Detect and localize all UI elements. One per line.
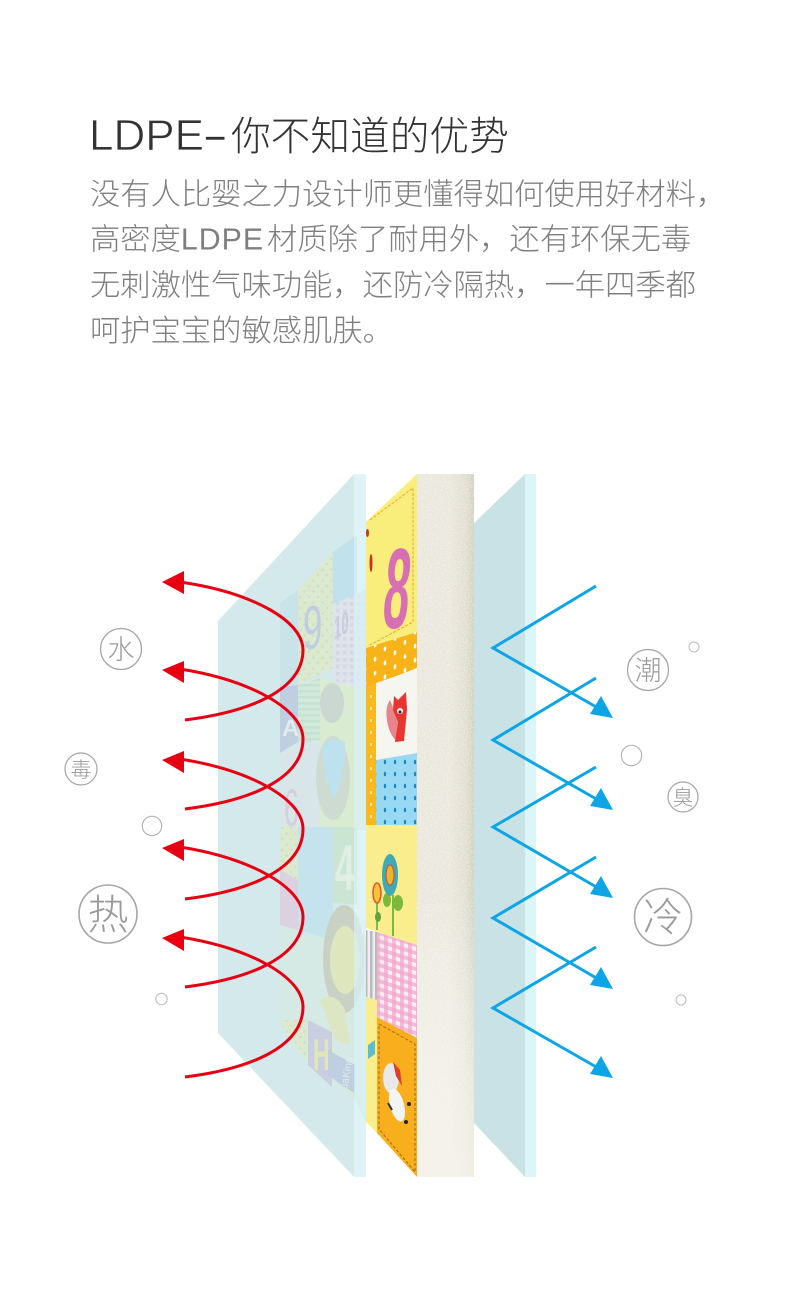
panel: mat pattern seen through left film: H (313, 1031, 330, 1080)
body paragraph: 高密度LDPE材质除了耐用外，还有环保无毒 (90, 222, 691, 256)
panel: mat pattern seen through left film: 6 (284, 778, 299, 837)
panel: mat pattern seen through left film: 4 (335, 833, 355, 905)
arrows: blue cold reflected (493, 586, 613, 1078)
arrow: blue 3 (493, 767, 613, 898)
bubble: right bottom small (676, 995, 686, 1005)
panel: edge of left film (354, 474, 366, 1177)
panel: mat pattern seen through left film: uaKing (338, 1056, 356, 1091)
body paragraph: 呵护宝宝的敏感肌肤。 (90, 314, 393, 348)
badge: damp: 潮 (634, 656, 662, 686)
mat tile: grey wave strip (366, 930, 377, 1000)
arrow: red 2 (162, 661, 303, 809)
mat tile: pink gingham (377, 932, 417, 1038)
title: - (202, 110, 228, 160)
panel: right protective film (474, 474, 536, 1177)
arrow: blue 2 (493, 678, 613, 810)
badge: cold: 冷 (643, 896, 683, 940)
mat tile: zebra on orange (377, 1017, 417, 1177)
panel: mat pattern seen through left film: A (282, 715, 299, 742)
mat tile: orange dots (366, 632, 417, 688)
body paragraph: 没有人比婴之力设计师更懂得如何使用好材料， (90, 178, 726, 212)
panel: printed mat face (366, 474, 417, 1177)
mat tile: number 8: 8 (379, 525, 416, 653)
badge: poison: 毒 (70, 759, 92, 782)
badge: heat (79, 885, 137, 943)
arrow: blue 5 (493, 947, 613, 1078)
mat tile: red fox (376, 669, 417, 760)
bubble: left large (142, 816, 162, 836)
panel: foam core (417, 474, 474, 1177)
badge: water: 水 (108, 635, 134, 665)
arrows: red heat reflected (162, 571, 303, 1077)
badge: odor: 臭 (672, 787, 694, 810)
bubble: right top small (689, 642, 699, 652)
body paragraph (90, 178, 726, 348)
title: LDPE (89, 111, 204, 160)
body paragraph: 无刺激性气味功能，还防冷隔热，一年四季都 (90, 268, 696, 302)
badge: damp (628, 650, 668, 690)
arrow: red 1 (162, 571, 303, 720)
arrow: red 3 (162, 751, 303, 899)
mat tile: flowers (366, 825, 417, 945)
mat tile: number 8 (366, 474, 417, 653)
bubble: right large (621, 745, 642, 766)
badge: heat: 热 (88, 892, 128, 938)
arrow: blue 4 (493, 857, 613, 989)
panel: mat pattern seen through left film: 10 (334, 605, 349, 648)
panel: mat pattern seen through left film (280, 535, 366, 1122)
title: 你不知道的优势 (231, 115, 509, 159)
bubble: left small (156, 993, 167, 1005)
arrow: red 4 (162, 839, 303, 987)
panel: left protective film (218, 474, 354, 1177)
badge: water (100, 628, 142, 670)
mat tile: orange strip (366, 684, 376, 825)
arrow: red 5 (162, 929, 303, 1077)
mat tile: lower yellow strip (366, 997, 377, 1133)
panel: mat pattern seen through left film: 9 (303, 590, 322, 664)
badge: cold (634, 888, 692, 946)
title (89, 110, 509, 160)
mat tile: blue dots (376, 753, 417, 825)
badge: poison (65, 753, 97, 785)
arrow: blue 1 (493, 586, 613, 718)
badge: odor (668, 782, 698, 812)
